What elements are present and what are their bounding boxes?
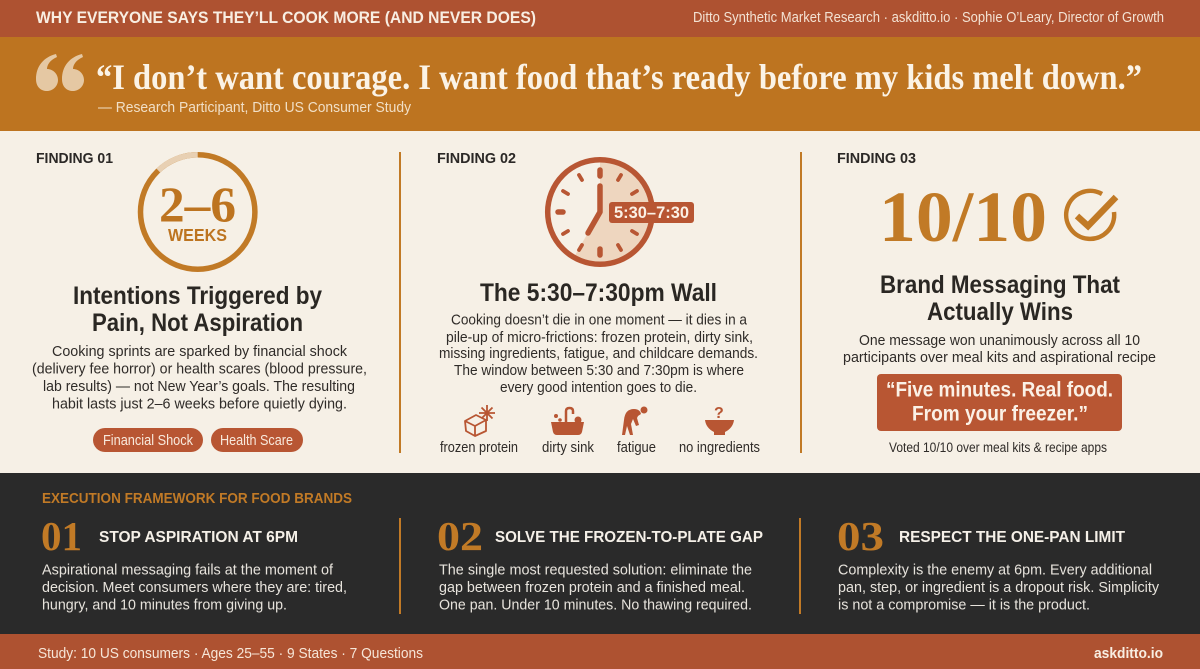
step body: pan, step, or ingredient is a dropout risk. Simplicity bbox=[838, 579, 1159, 596]
icon label: dirty sink bbox=[542, 440, 595, 456]
step title: SOLVE THE FROZEN-TO-PLATE GAP bbox=[495, 529, 763, 546]
body text: Cooking doesn’t die in one moment — it dies in a bbox=[451, 312, 748, 328]
stat value: 2–6 bbox=[159, 176, 236, 232]
tag: health scare bbox=[211, 428, 303, 452]
ring stat: 2–6 weeks bbox=[140, 155, 255, 269]
finding label 02: FINDING 02 bbox=[437, 150, 516, 167]
heading bbox=[73, 282, 322, 337]
step 02 bbox=[437, 513, 763, 614]
clock icon with time window bbox=[548, 160, 694, 264]
panel: finding 02 bbox=[437, 150, 760, 456]
icon: checkmark bbox=[1066, 191, 1116, 239]
body text: habit lasts just 2–6 weeks before quietly dying. bbox=[52, 396, 347, 412]
heading bbox=[880, 271, 1121, 326]
icon: quotation mark bbox=[36, 54, 84, 91]
heading: Intentions Triggered by bbox=[73, 282, 322, 310]
icon: dirty sink bbox=[542, 408, 595, 456]
step title: RESPECT THE ONE-PAN LIMIT bbox=[899, 529, 1125, 546]
title: WHY EVERYONE SAYS THEY’LL COOK MORE (AND NEVER DOES) bbox=[36, 9, 536, 27]
icon: frozen protein bbox=[440, 405, 518, 456]
time window label: 5:30–7:30 bbox=[614, 204, 689, 222]
step body bbox=[838, 562, 1159, 614]
tag: financial shock bbox=[93, 428, 203, 452]
step title: STOP ASPIRATION AT 6PM bbox=[99, 529, 298, 546]
step body: is not a compromise — it is the product. bbox=[838, 596, 1090, 614]
footer bar bbox=[0, 634, 1200, 669]
heading: The 5:30–7:30pm Wall bbox=[480, 279, 717, 307]
tag: health scare: Health Scare bbox=[220, 433, 293, 449]
body text: participants over meal kits and aspirational recipe bbox=[843, 349, 1156, 366]
heading: Actually Wins bbox=[927, 298, 1073, 326]
top bar bbox=[0, 0, 1200, 37]
step number: 01 bbox=[41, 513, 82, 559]
step number: 02 bbox=[437, 513, 483, 559]
body text bbox=[843, 332, 1156, 366]
icon: fatigue bbox=[617, 406, 656, 456]
winning message callout bbox=[877, 374, 1122, 431]
finding label 01: FINDING 01 bbox=[36, 150, 113, 167]
icon label: no ingredients bbox=[679, 440, 760, 456]
step body: decision. Meet consumers where they are: tired, bbox=[42, 579, 347, 596]
body text: Cooking sprints are sparked by financial shock bbox=[52, 343, 347, 360]
quote band bbox=[0, 37, 1200, 131]
step body: The single most requested solution: eliminate the bbox=[439, 562, 752, 578]
website: askditto.io bbox=[1094, 645, 1163, 662]
winning message callout: “Five minutes. Real food. bbox=[886, 378, 1113, 402]
body text: (delivery fee horror) or health scares (blood pressure, bbox=[32, 360, 367, 378]
body text: pile-up of micro-frictions: frozen protein, dirty sink, bbox=[446, 329, 753, 346]
step body bbox=[42, 562, 347, 614]
score value: 10/10 bbox=[879, 177, 1047, 257]
stat unit: WEEKS bbox=[168, 225, 227, 245]
heading: Brand Messaging That bbox=[880, 271, 1121, 299]
icon label: frozen protein bbox=[440, 440, 518, 456]
step body: Aspirational messaging fails at the moment of bbox=[42, 562, 334, 578]
body text: The window between 5:30 and 7:30pm is where bbox=[454, 362, 744, 379]
panel: finding 01 bbox=[32, 150, 367, 452]
panel: finding 03 bbox=[837, 150, 1156, 455]
tag: financial shock: Financial Shock bbox=[103, 433, 194, 449]
callout caption: Voted 10/10 over meal kits & recipe apps bbox=[889, 440, 1107, 455]
panel: execution framework bbox=[0, 473, 1200, 634]
quote attribution: — Research Participant, Ditto US Consumer Study bbox=[98, 99, 411, 116]
body text: missing ingredients, fatigue, and childcare demands. bbox=[439, 345, 758, 362]
step body: gap between frozen protein and a finished meal. bbox=[439, 579, 745, 596]
body text: lab results) — not New Year’s goals. The resulting bbox=[43, 378, 355, 395]
step 01 bbox=[41, 513, 347, 614]
body text: One message won unanimously across all 10 bbox=[859, 332, 1140, 349]
step body: Complexity is the enemy at 6pm. Every additional bbox=[838, 562, 1152, 578]
question mark: ? bbox=[714, 405, 724, 422]
step body: hungry, and 10 minutes from giving up. bbox=[42, 596, 287, 614]
body text bbox=[439, 312, 758, 396]
section heading: EXECUTION FRAMEWORK FOR FOOD BRANDS bbox=[42, 491, 352, 507]
body text: every good intention goes to die. bbox=[500, 379, 697, 396]
study details: Study: 10 US consumers · Ages 25–55 · 9 States · 7 Questions bbox=[38, 645, 423, 662]
finding label 03: FINDING 03 bbox=[837, 150, 916, 167]
body text bbox=[32, 343, 367, 412]
icon label: fatigue bbox=[617, 440, 656, 456]
step body bbox=[439, 562, 752, 614]
heading: Pain, Not Aspiration bbox=[92, 309, 303, 337]
icon: no ingredients bbox=[679, 405, 760, 456]
step body: One pan. Under 10 minutes. No thawing required. bbox=[439, 596, 752, 614]
step 03 bbox=[837, 513, 1159, 614]
winning message callout: From your freezer.” bbox=[912, 402, 1088, 426]
step number: 03 bbox=[837, 513, 884, 559]
